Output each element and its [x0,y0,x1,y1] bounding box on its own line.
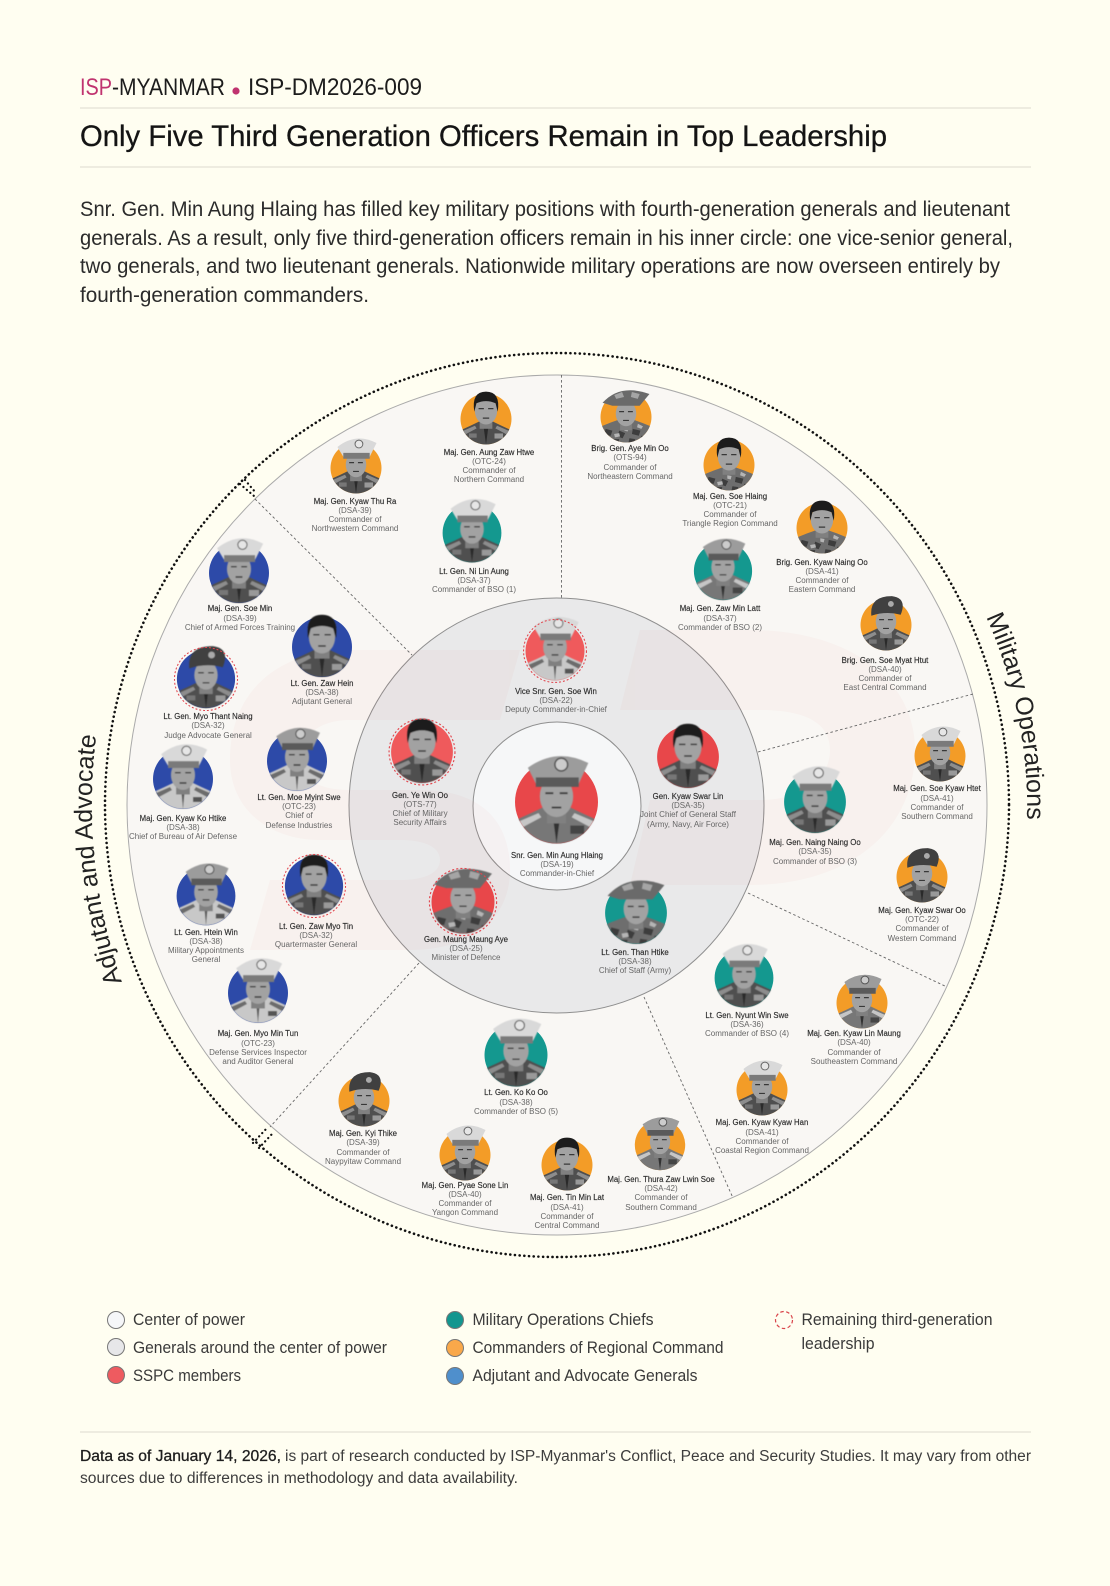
officer: Lt. Gen. Nyunt Win Swe: Lt. Gen. Nyunt Win Swe [705,1011,789,1020]
panel: center of power [473,722,641,890]
intro paragraph: fourth-generation commanders. [80,283,369,307]
officer: Snr. Gen. Min Aung Hlaing: (DSA-19) [540,860,574,869]
officer: Maj. Gen. Soe Kyaw Htet: Southern Command [901,812,973,821]
officer: Lt. Gen. Zaw Myo Tin: (DSA-32) [299,931,333,940]
officer: Vice Snr. Gen. Soe Win: (DSA-22) [539,696,573,705]
footer note: Data as of January 14, 2026, [80,1448,281,1465]
officer: Maj. Gen. Kyaw Swar Oo [878,848,966,943]
officer: Lt. Gen. Moe Myint Swe: Chief of [285,811,314,820]
officer: Lt. Gen. Than Htike: Chief of Staff (Army) [599,966,671,975]
officer: Vice Snr. Gen. Soe Win [505,617,608,714]
officer: Snr. Gen. Min Aung Hlaing [509,756,604,878]
header: organisation and document code: ISP [80,74,112,101]
ring break marks lower left [253,1128,272,1148]
title: Only Five Third Generation Officers Remain in Top Leadership [80,120,887,153]
officer: Lt. Gen. Than Htike: Lt. Gen. Than Htike [601,948,669,957]
officer: Lt. Gen. Zaw Myo Tin: Quartermaster General [275,940,357,949]
officer: Maj. Gen. Soe Hlaing [682,438,778,528]
officer: Lt. Gen. Htein Win: Military Appointments [168,946,244,955]
label: Military Operations: Military Operations [987,612,1044,819]
officer: Maj. Gen. Pyae Sone Lin: Commander of [439,1199,492,1208]
label: Adjutant and Advocate: Adjutant and Advocate [74,736,122,982]
sector dividers [255,375,973,1198]
officer: Gen. Kyaw Swar Lin: Joint Chief of General Staff [640,810,737,819]
officer: Maj. Gen. Soe Kyaw Htet: Maj. Gen. Soe Kyaw Htet [893,784,982,793]
header: organisation and document code [80,74,422,101]
officer: Lt. Gen. Than Htike [599,881,671,975]
officer: Lt. Gen. Ko Ko Oo: Commander of BSO (5) [474,1107,558,1116]
header: organisation and document code: -MYANMAR [112,74,225,101]
officer: Maj. Gen. Kyaw Swar Oo: (OTC-22) [905,915,939,924]
officer: Lt. Gen. Ni Lin Aung: Lt. Gen. Ni Lin Aung [439,567,509,576]
officer: Snr. Gen. Min Aung Hlaing: Snr. Gen. Min Aung Hlaing [511,851,603,860]
officer: Maj. Gen. Soe Min [185,538,295,632]
legend item: remaining third-generation leadership [776,1311,992,1353]
officer: Lt. Gen. Ni Lin Aung: (DSA-37) [457,576,491,585]
officer: Lt. Gen. Moe Myint Swe: (OTC-23) [282,802,316,811]
officer: Lt. Gen. Ni Lin Aung [432,499,516,594]
intro paragraph [80,197,1013,307]
officer: Gen. Kyaw Swar Lin: (Army, Navy, Air Force) [647,820,729,829]
officer: Maj. Gen. Myo Min Tun: Maj. Gen. Myo Min Tun [218,1029,298,1038]
officer: Lt. Gen. Moe Myint Swe [257,728,341,830]
officer: Maj. Gen. Thura Zaw Lwin Soe [607,1117,715,1212]
officer: Maj. Gen. Kyaw Thu Ra: Maj. Gen. Kyaw Thu Ra [314,497,397,506]
officer: Maj. Gen. Thura Zaw Lwin Soe: Southern Command [625,1203,697,1212]
officer: Maj. Gen. Soe Kyaw Htet: (DSA-41) [920,794,954,803]
officer: Gen. Kyaw Swar Lin: (DSA-35) [671,801,705,810]
legend item: center of power: Center of power [133,1311,245,1329]
officer: Gen. Ye Win Oo: Gen. Ye Win Oo [392,791,449,800]
officer: Maj. Gen. Pyae Sone Lin: Yangon Command [432,1208,498,1217]
officer: Maj. Gen. Kyaw Swar Oo: Commander of [896,924,949,933]
officer: Lt. Gen. Moe Myint Swe: Lt. Gen. Moe Myint Swe [257,793,341,802]
intro paragraph: Snr. Gen. Min Aung Hlaing has filled key military positions with fourth-generation generals and lieutenant [80,197,1010,221]
legend [108,1311,992,1385]
officer: Lt. Gen. Myo Thant Naing: Judge Advocate General [164,731,252,740]
officer: Maj. Gen. Kyaw Swar Oo: Western Command [888,934,956,943]
officer: Lt. Gen. Htein Win [168,863,244,964]
officer: Maj. Gen. Kyaw Kyaw Han [715,1061,809,1155]
officer: Maj. Gen. Zaw Min Latt: Maj. Gen. Zaw Min Latt [680,604,761,613]
legend item: commanders of regional command: Commanders of Regional Command [472,1339,724,1357]
officer: Lt. Gen. Than Htike: (DSA-38) [618,957,652,966]
officer: Gen. Maung Maung Aye: (DSA-25) [449,944,483,953]
officer: Lt. Gen. Moe Myint Swe: Defense Industries [266,821,332,830]
officer: Maj. Gen. Naing Naing Oo: Commander of BSO (3) [773,857,857,866]
officer: Lt. Gen. Htein Win: General [192,955,220,964]
officer: Maj. Gen. Zaw Min Latt [678,539,762,632]
header: organisation and document code: ISP-DM2026-009 [248,74,422,101]
officer: Lt. Gen. Zaw Hein: Adjutant General [292,697,352,706]
officer: Lt. Gen. Nyunt Win Swe: Commander of BSO (4) [705,1029,789,1038]
intro paragraph: generals. As a result, only five third-generation officers remain in his inner circle: one vice-senior general, [80,226,1013,250]
officer: Maj. Gen. Tin Min Lat: Commander of [541,1212,594,1221]
officer: Maj. Gen. Soe Hlaing: (OTC-21) [713,501,747,510]
officer: Maj. Gen. Kyaw Swar Oo: Maj. Gen. Kyaw Swar Oo [878,906,966,915]
officer: Maj. Gen. Soe Kyaw Htet: Commander of [911,803,964,812]
officer: Maj. Gen. Kyaw Kyaw Han: Coastal Region Command [715,1146,809,1155]
officer: Vice Snr. Gen. Soe Win: Deputy Commander-in-Chief [505,705,608,714]
officer: Brig. Gen. Soe Myat Htut: Commander of [859,674,912,683]
panel: generals around the center of power [349,598,764,1013]
officer: Maj. Gen. Pyae Sone Lin: (DSA-40) [448,1190,482,1199]
officer: Lt. Gen. Ko Ko Oo [474,1019,558,1116]
officer: Maj. Gen. Kyaw Thu Ra [312,439,398,533]
officer: Maj. Gen. Tin Min Lat: (DSA-41) [550,1203,584,1212]
officer: Brig. Gen. Kyaw Naing Oo: Eastern Command [789,585,855,594]
officer: Maj. Gen. Soe Hlaing: Triangle Region Command [682,519,778,528]
officer: Lt. Gen. Nyunt Win Swe [705,944,789,1038]
legend item: SSPC members: SSPC members [133,1367,241,1385]
officer: Gen. Kyaw Swar Lin [640,724,737,829]
officer: Lt. Gen. Myo Thant Naing [163,646,253,740]
officer: Maj. Gen. Aung Zaw Htwe: (OTC-24) [472,457,506,466]
legend item: remaining third-generation leadership: Remaining third-generation [802,1311,992,1329]
officer: Gen. Kyaw Swar Lin: Gen. Kyaw Swar Lin [653,792,723,801]
officer: Maj. Gen. Soe Hlaing: Maj. Gen. Soe Hlaing [693,492,767,501]
officer: Gen. Maung Maung Aye [424,868,508,962]
officer: Lt. Gen. Zaw Hein: (DSA-38) [305,688,339,697]
officer: Maj. Gen. Kyaw Ko Htike: (DSA-38) [166,823,200,832]
officer: Lt. Gen. Htein Win: Lt. Gen. Htein Win [174,928,238,937]
panel: outer ring of commands [127,375,987,1235]
officer: Maj. Gen. Kyaw Lin Maung: Southeastern Command [811,1057,897,1066]
officer: Lt. Gen. Zaw Hein [288,615,356,706]
legend item: adjutant and advocate generals: Adjutant and Advocate Generals [472,1367,698,1385]
officer: Maj. Gen. Kyi Thike: (DSA-39) [346,1138,380,1147]
officer: Maj. Gen. Naing Naing Oo: Maj. Gen. Naing Naing Oo [769,838,861,847]
officer: Maj. Gen. Kyi Thike: Naypyitaw Command [325,1157,401,1166]
officer: Maj. Gen. Tin Min Lat: Central Command [535,1221,599,1230]
officer: Brig. Gen. Kyaw Naing Oo: Commander of [796,576,849,585]
officer: Maj. Gen. Pyae Sone Lin [422,1126,508,1217]
intro paragraph: two generals, and two lieutenant generals. Nationwide military operations are now overseen entirely by [80,254,1000,278]
officer: Brig. Gen. Aye Min Oo: Commander of [604,463,657,472]
officer: Maj. Gen. Zaw Min Latt: (DSA-37) [703,614,737,623]
officer: Maj. Gen. Kyaw Lin Maung: Maj. Gen. Kyaw Lin Maung [807,1029,901,1038]
officer: Maj. Gen. Tin Min Lat: Maj. Gen. Tin Min Lat [530,1193,605,1202]
officer: Maj. Gen. Kyaw Thu Ra: Commander of [329,515,382,524]
footer note [80,1448,1031,1487]
officer: Maj. Gen. Thura Zaw Lwin Soe: (DSA-42) [644,1184,678,1193]
officer: Maj. Gen. Tin Min Lat [530,1138,605,1230]
legend item: remaining third-generation leadership: leadership [802,1335,874,1353]
officer: Maj. Gen. Soe Kyaw Htet [893,727,982,821]
officer: Maj. Gen. Thura Zaw Lwin Soe: Commander of [635,1193,688,1202]
officer: Maj. Gen. Aung Zaw Htwe: Northern Command [454,475,524,484]
officer: Gen. Maung Maung Aye: Minister of Defence [432,953,501,962]
officer: Gen. Ye Win Oo [387,719,457,827]
officer: Lt. Gen. Nyunt Win Swe: (DSA-36) [730,1020,764,1029]
officer: Maj. Gen. Aung Zaw Htwe: Commander of [463,466,516,475]
officer: Maj. Gen. Kyaw Thu Ra: (DSA-39) [338,506,372,515]
officer: Maj. Gen. Kyaw Ko Htike: Chief of Bureau of Air Defense [129,832,238,841]
officer: Brig. Gen. Aye Min Oo [587,390,673,481]
officer: Maj. Gen. Naing Naing Oo: (DSA-35) [798,847,832,856]
legend item: military operations chiefs: Military Operations Chiefs [472,1311,654,1329]
officer: Maj. Gen. Zaw Min Latt: Commander of BSO (2) [678,623,762,632]
footer note: is part of research conducted by ISP-Myanmar's Conflict, Peace and Security Studies. It may vary from other [285,1448,1031,1465]
officer: Maj. Gen. Soe Min: Chief of Armed Forces Training [185,623,295,632]
officer: Maj. Gen. Kyaw Kyaw Han: Commander of [736,1137,789,1146]
officer: Maj. Gen. Kyaw Lin Maung: Commander of [828,1048,881,1057]
officer: Lt. Gen. Ni Lin Aung: Commander of BSO (1) [432,585,516,594]
officer: Brig. Gen. Kyaw Naing Oo [776,501,868,594]
officer: Brig. Gen. Kyaw Naing Oo: Brig. Gen. Kyaw Naing Oo [776,558,868,567]
officer: Maj. Gen. Kyaw Lin Maung [807,975,901,1066]
officer: Brig. Gen. Soe Myat Htut: (DSA-40) [868,665,902,674]
officer: Brig. Gen. Kyaw Naing Oo: (DSA-41) [805,567,839,576]
officer: Maj. Gen. Kyaw Lin Maung: (DSA-40) [837,1038,871,1047]
officer: Brig. Gen. Soe Myat Htut: East Central Command [843,683,927,692]
officer: Maj. Gen. Naing Naing Oo [769,766,861,866]
officer: Brig. Gen. Soe Myat Htut: Brig. Gen. Soe Myat Htut [842,656,929,665]
officer: Gen. Ye Win Oo: (OTS-77) [403,800,437,809]
officer: Maj. Gen. Kyi Thike: Maj. Gen. Kyi Thike [329,1129,397,1138]
officer: Lt. Gen. Ko Ko Oo: (DSA-38) [499,1098,533,1107]
legend item: generals around the center of power: Generals around the center of power [133,1339,387,1357]
officer: Brig. Gen. Aye Min Oo: Northeastern Command [587,472,673,481]
ring break marks upper left [240,480,256,496]
officer: Maj. Gen. Kyi Thike: Commander of [337,1148,390,1157]
officer: Lt. Gen. Myo Thant Naing: (DSA-32) [191,721,225,730]
officer: Maj. Gen. Aung Zaw Htwe: Maj. Gen. Aung Zaw Htwe [444,448,534,457]
officer: Maj. Gen. Soe Hlaing: Commander of [704,510,757,519]
officer: Vice Snr. Gen. Soe Win: Vice Snr. Gen. Soe Win [515,687,597,696]
officer: Maj. Gen. Kyaw Kyaw Han: Maj. Gen. Kyaw Kyaw Han [716,1118,808,1127]
footer note: sources due to differences in methodology and data availability. [80,1470,518,1487]
officer: Gen. Ye Win Oo: Chief of Military [392,809,448,818]
officer: Maj. Gen. Myo Min Tun: (OTC-23) [241,1039,275,1048]
officer: Maj. Gen. Kyi Thike [325,1072,401,1166]
officer: Maj. Gen. Thura Zaw Lwin Soe: Maj. Gen. Thura Zaw Lwin Soe [607,1175,715,1184]
faint logo watermark [230,630,915,950]
officer: Maj. Gen. Soe Min: Maj. Gen. Soe Min [208,604,272,613]
dotted outer ring [105,353,1009,1257]
officer: Brig. Gen. Aye Min Oo: (OTS-94) [613,453,647,462]
officer: Maj. Gen. Kyaw Ko Htike: Maj. Gen. Kyaw Ko Htike [140,814,226,823]
officer: Gen. Ye Win Oo: Security Affairs [393,818,447,827]
officer: Maj. Gen. Soe Min: (DSA-39) [223,614,257,623]
officer: Gen. Maung Maung Aye: Gen. Maung Maung Aye [424,935,508,944]
officer: Maj. Gen. Kyaw Kyaw Han: (DSA-41) [745,1128,779,1137]
officer: Maj. Gen. Pyae Sone Lin: Maj. Gen. Pyae Sone Lin [422,1181,508,1190]
officer: Lt. Gen. Myo Thant Naing: Lt. Gen. Myo Thant Naing [163,712,253,721]
officer: Maj. Gen. Myo Min Tun: and Auditor General [222,1057,294,1066]
officer: Maj. Gen. Kyaw Ko Htike [129,744,238,841]
officer: Brig. Gen. Aye Min Oo: Brig. Gen. Aye Min Oo [591,444,669,453]
officer: Maj. Gen. Myo Min Tun [209,958,307,1066]
officer: Lt. Gen. Ko Ko Oo: Lt. Gen. Ko Ko Oo [484,1088,549,1097]
officer: Lt. Gen. Zaw Myo Tin [275,854,357,949]
officer: Maj. Gen. Aung Zaw Htwe [444,392,534,484]
officer: Brig. Gen. Soe Myat Htut [842,596,929,692]
officer: Lt. Gen. Htein Win: (DSA-38) [189,937,223,946]
officer: Maj. Gen. Myo Min Tun: Defense Services Inspector [209,1048,307,1057]
officer: Lt. Gen. Zaw Myo Tin: Lt. Gen. Zaw Myo Tin [279,922,353,931]
officer: Maj. Gen. Kyaw Thu Ra: Northwestern Command [312,524,398,533]
officer: Lt. Gen. Zaw Hein: Lt. Gen. Zaw Hein [291,679,353,688]
officer: Snr. Gen. Min Aung Hlaing: Commander-in-Chief [520,869,595,878]
